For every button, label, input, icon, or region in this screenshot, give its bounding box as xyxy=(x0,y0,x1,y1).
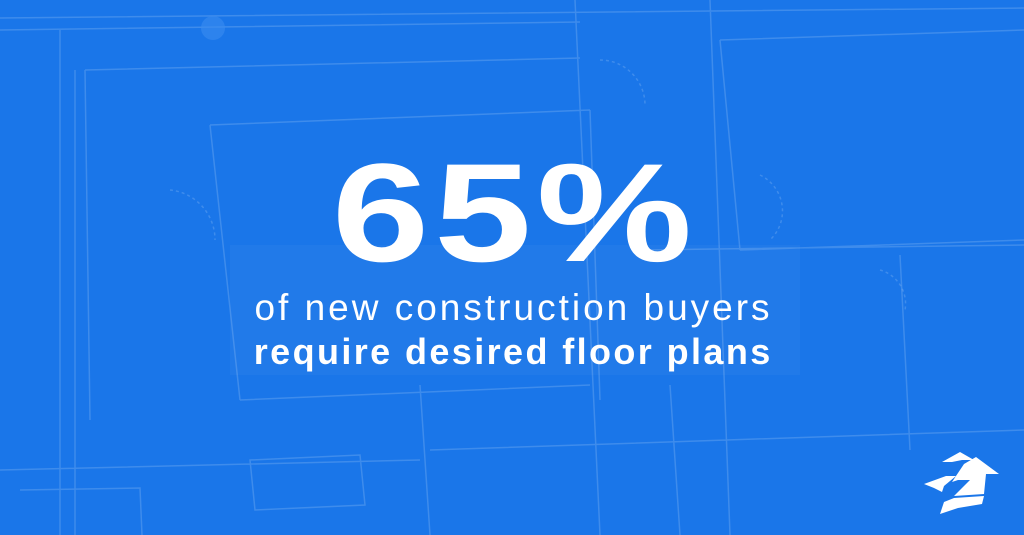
headline statistic: 65% xyxy=(332,134,697,291)
subtitle line 2: require desired floor plans xyxy=(254,331,773,372)
icon: zillow logo xyxy=(924,452,999,514)
subtitle line 1: of new construction buyers xyxy=(254,287,773,328)
